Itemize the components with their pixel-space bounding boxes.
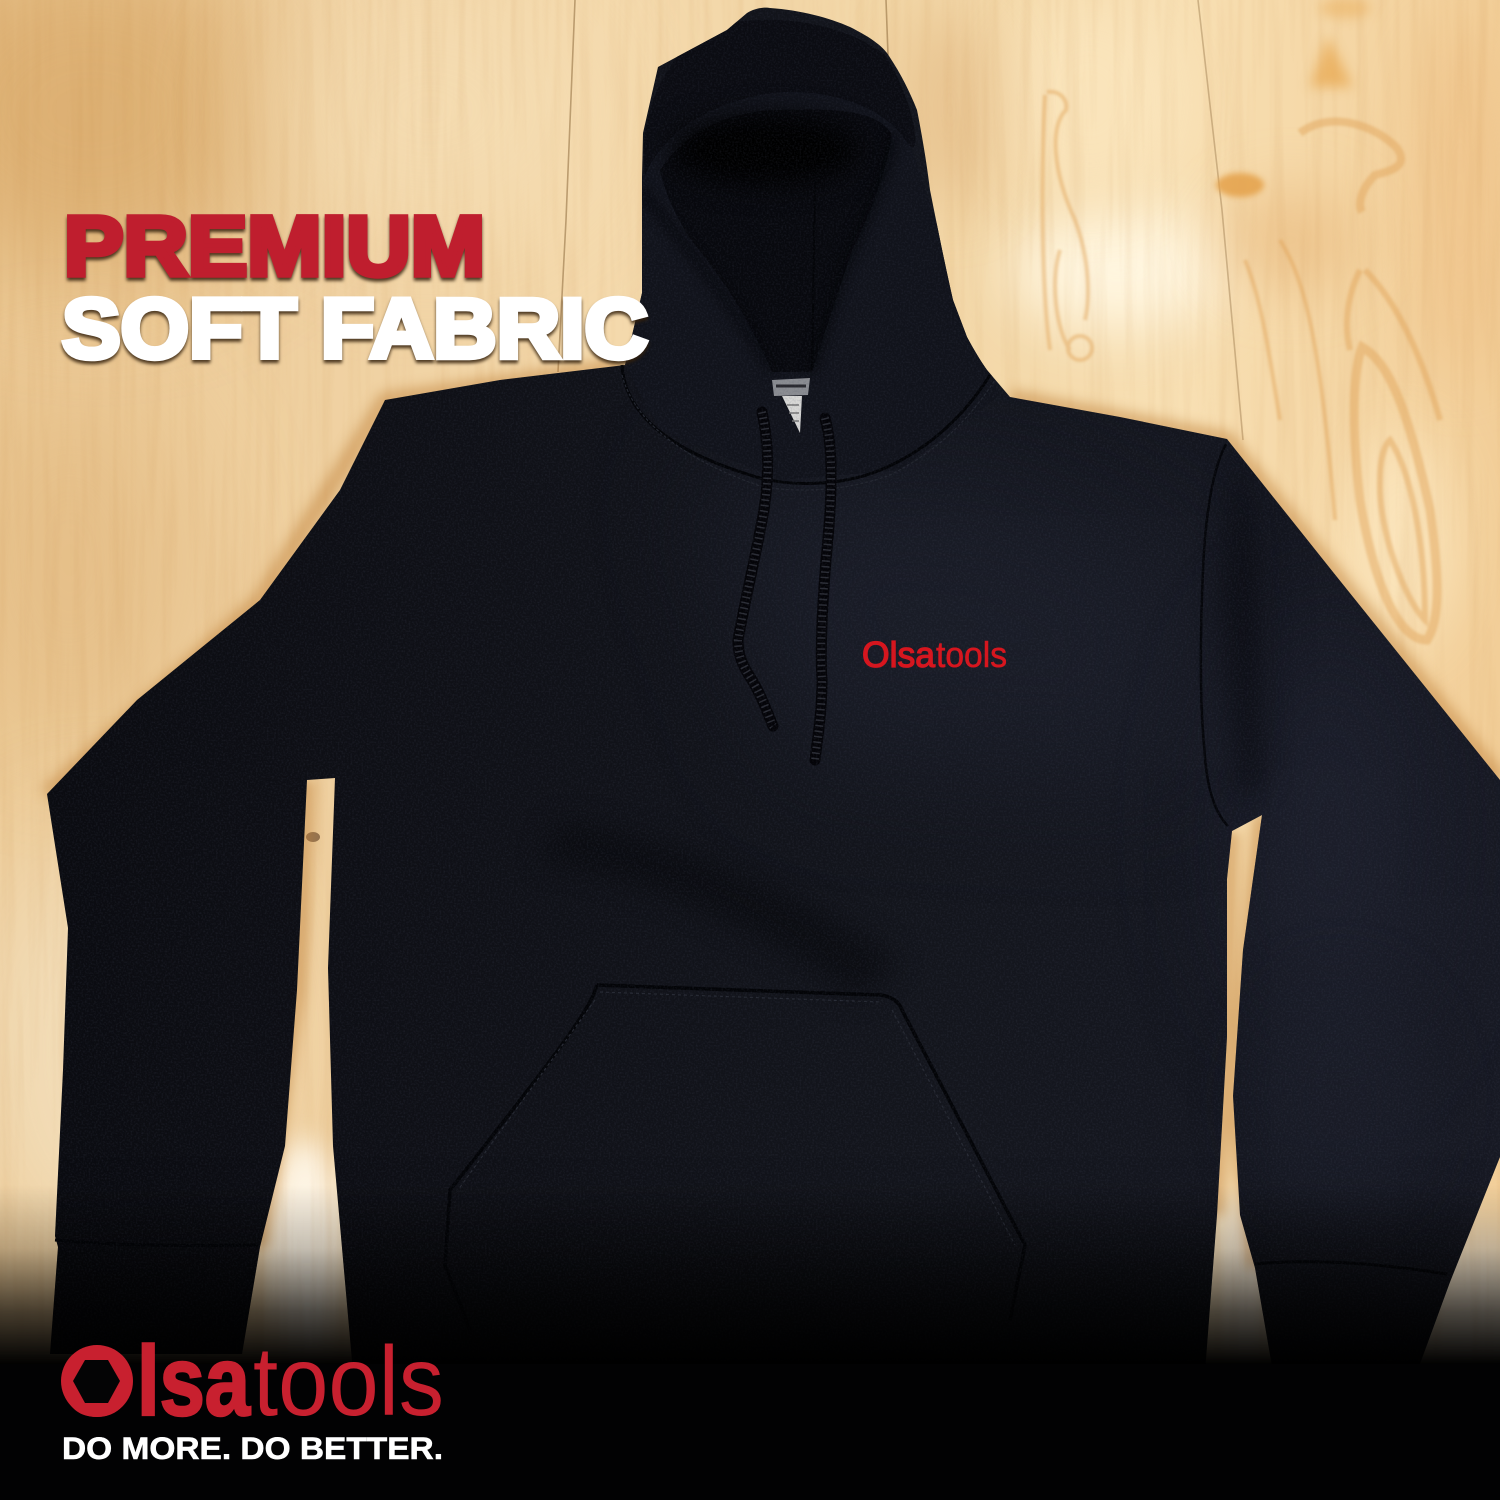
logo hex O mark: O — [60, 1327, 134, 1437]
wood grain contours — [1043, 92, 1440, 640]
headline: SOFT FABRIC: SOFT FABRIC — [62, 282, 648, 376]
embroidered logo — [862, 634, 1007, 675]
plank seams — [558, 0, 1243, 440]
logo wordmark thin part: tools — [253, 1326, 444, 1436]
bottom black gradient band — [0, 1185, 1500, 1500]
drawstrings — [738, 412, 831, 760]
embroidered logo: Olsa — [862, 634, 936, 675]
embroidered logo: tools — [936, 634, 1007, 675]
neck seam stitching — [622, 365, 995, 490]
tagline: DO MORE. DO BETTER. — [62, 1430, 443, 1466]
fabric folds and shading — [0, 450, 1500, 1420]
headline: PREMIUM: PREMIUM — [64, 199, 485, 293]
brand logo — [60, 1326, 444, 1437]
headline — [62, 199, 648, 376]
hoodie edge glow on wood — [47, 365, 1500, 1268]
kangaroo pocket — [445, 985, 1025, 1330]
sleeve seam — [1201, 444, 1228, 826]
neck label — [772, 378, 810, 433]
wood knot — [1216, 0, 1371, 197]
hood — [625, 20, 992, 376]
sleeve cuffs — [55, 1240, 1447, 1274]
logo wordmark bold part: lsa — [137, 1326, 251, 1436]
